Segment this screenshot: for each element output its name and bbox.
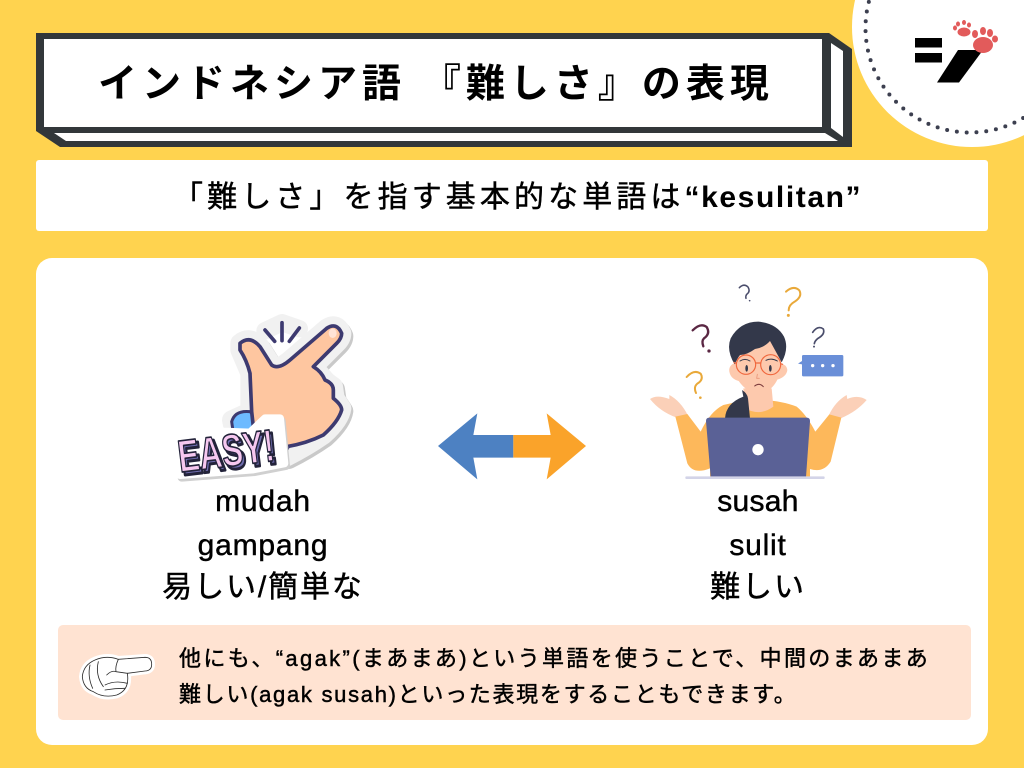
note text line 1: 他にも、“agak”(まあまあ)という単語を使うことで、中間のまあまあ xyxy=(179,646,930,671)
hair tail xyxy=(725,390,750,418)
laptop xyxy=(685,418,825,479)
word susah: susah xyxy=(717,485,799,518)
icon: pointing hand xyxy=(79,654,155,700)
sticker word EASY: EASY! xyxy=(178,423,280,485)
label: hard words xyxy=(710,485,806,604)
title banner xyxy=(36,33,852,147)
word mudah: mudah xyxy=(215,485,311,518)
hands xyxy=(650,395,688,418)
logo badge xyxy=(852,0,1024,147)
word gampang: gampang xyxy=(198,529,328,562)
question marks xyxy=(687,285,824,399)
word muzukashii: 難しい xyxy=(710,571,806,604)
neck xyxy=(743,388,773,412)
sticker word EASY xyxy=(175,419,280,485)
double arrow xyxy=(438,414,586,480)
sticker word EASY: EASY! xyxy=(175,420,277,482)
speech bubble xyxy=(798,355,843,376)
sweater xyxy=(675,399,841,477)
word sulit: sulit xyxy=(729,529,787,562)
face xyxy=(729,338,787,394)
hair xyxy=(729,322,786,364)
note panel xyxy=(58,625,971,720)
subtitle panel xyxy=(36,160,988,231)
main panel xyxy=(36,258,988,745)
subtitle text: 「難しさ」を指す基本的な単語は“kesulitan” xyxy=(173,181,862,214)
note text line 2: 難しい(agak susah)といった表現をすることもできます。 xyxy=(179,682,798,707)
title text: インドネシア語 『難しさ』の表現 xyxy=(98,63,774,106)
illustration: confused person at laptop xyxy=(650,284,866,479)
glasses xyxy=(734,355,783,375)
illustration: easy hand sticker xyxy=(175,314,354,485)
label: easy words xyxy=(162,485,364,604)
word yasashii / kantan: 易しい/簡単な xyxy=(162,571,364,604)
